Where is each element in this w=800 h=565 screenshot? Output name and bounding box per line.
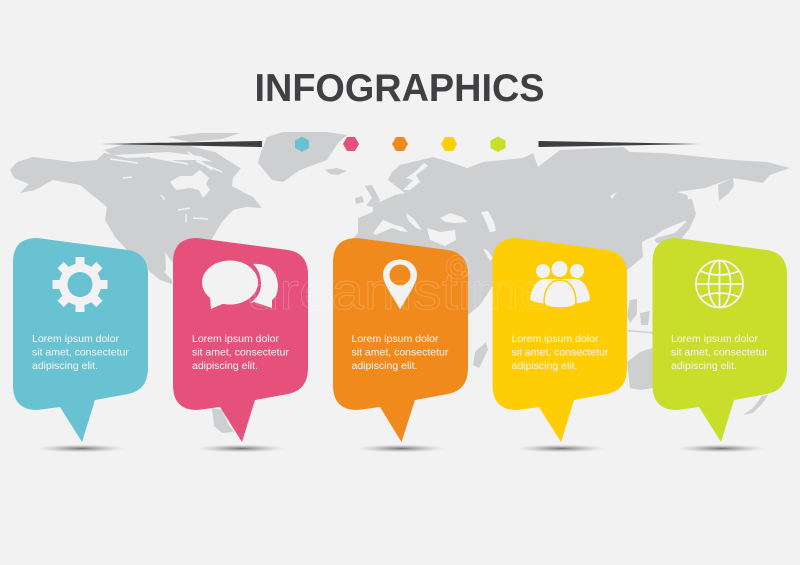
shadow — [677, 444, 765, 452]
seas and lakes — [373, 163, 657, 261]
watermark: dreamstime — [247, 263, 552, 321]
japan — [653, 199, 696, 244]
icon: chat bubbles — [202, 260, 278, 309]
text block: Lorem ipsum dolor — [32, 333, 119, 345]
blue hexagon — [295, 136, 309, 152]
icon: gear — [52, 257, 108, 312]
panel: yellow people callout — [492, 238, 627, 452]
text block: sit amet, consectetur — [352, 346, 449, 358]
yellow hexagon — [441, 137, 457, 151]
speech bubble — [492, 238, 627, 442]
indonesia islands — [627, 299, 653, 334]
canadian arctic islands — [104, 133, 240, 168]
text block: sit amet, consectetur — [512, 346, 609, 358]
world map — [10, 132, 790, 433]
hexagon markers — [295, 136, 506, 152]
eurasia and africa — [352, 147, 790, 315]
green hexagon — [490, 136, 506, 152]
shadow — [517, 444, 605, 452]
text block: adipiscing elit. — [352, 360, 417, 372]
text block: adipiscing elit. — [192, 360, 258, 372]
shadow — [37, 444, 125, 452]
iceland — [325, 168, 347, 175]
speech bubble — [173, 238, 308, 442]
madagascar — [473, 342, 488, 368]
kamchatka — [718, 178, 734, 201]
icon: group of people — [530, 261, 590, 308]
speech bubble — [13, 238, 148, 442]
pink hexagon — [343, 137, 359, 151]
left dark wedge — [100, 141, 262, 147]
panel: pink chat callout — [173, 238, 308, 452]
greenland — [258, 132, 347, 182]
arctic channels and great lakes — [110, 152, 222, 222]
central america — [148, 256, 172, 284]
text block: Lorem ipsum dolor — [512, 333, 599, 345]
orange hexagon — [392, 137, 408, 151]
text block: adipiscing elit. — [512, 360, 577, 372]
icon: location pin — [383, 260, 417, 310]
text block: Lorem ipsum dolor — [671, 333, 758, 345]
shadow — [357, 444, 445, 452]
text block: sit amet, consectetur — [192, 346, 289, 358]
shadow — [197, 444, 285, 452]
north america — [10, 153, 262, 278]
hudson bay — [170, 170, 210, 198]
text block: sit amet, consectetur — [671, 346, 768, 358]
new zealand — [743, 395, 768, 415]
panel: orange pin callout — [333, 238, 468, 452]
panel: green globe callout — [652, 238, 787, 452]
uk and ireland — [355, 185, 380, 207]
text block: adipiscing elit. — [671, 360, 737, 372]
speech bubble — [652, 238, 787, 442]
text block: Lorem ipsum dolor — [352, 333, 439, 345]
icon: globe — [696, 260, 743, 308]
text block: Lorem ipsum dolor — [192, 333, 279, 345]
speech bubble — [333, 238, 468, 442]
right dark wedge — [538, 141, 700, 147]
panel: blue gear callout — [13, 238, 148, 452]
title: INFOGRAPHICS — [254, 67, 544, 110]
text block: sit amet, consectetur — [32, 346, 129, 358]
south america tip — [212, 408, 234, 433]
australia — [627, 348, 653, 390]
text block: adipiscing elit. — [32, 360, 98, 372]
